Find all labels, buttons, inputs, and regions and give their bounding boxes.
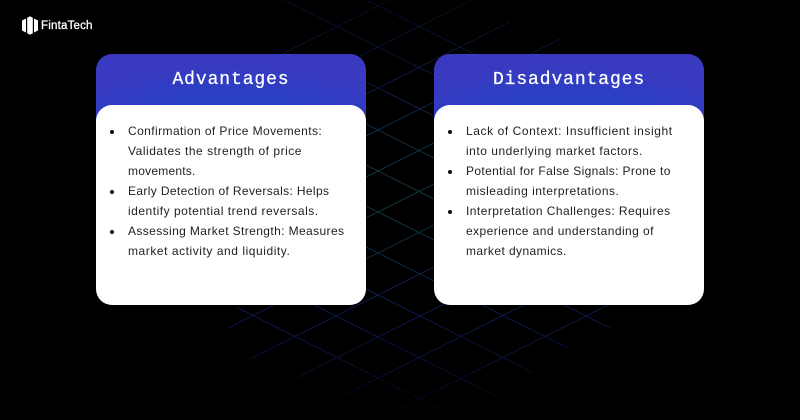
heading: disadvantages [434,54,704,134]
heading: disadvantages: Disadvantages [493,70,645,90]
list: disadvantages [434,105,704,305]
heading: advantages [96,54,366,134]
advantage: early detection of reversals: Early Detection of Reversals: Helps [128,184,329,198]
panel: disadvantages [434,54,704,305]
disadvantage: potential for false signals: misleading interpretations. [466,184,619,198]
advantage: confirmation of price movements: Validates the strength of price [128,144,302,158]
advantage: assessing market strength: market activity and liquidity. [128,244,290,258]
advantage: confirmation of price movements [128,121,363,181]
disadvantage: lack of context: into underlying market factors. [466,144,643,158]
disadvantage: potential for false signals: Potential for False Signals: Prone to [466,164,671,178]
advantage: early detection of reversals [128,181,363,221]
disadvantage: interpretation challenges: experience and understanding of [466,224,654,238]
disadvantage: interpretation challenges: Interpretation Challenges: Requires [466,204,671,218]
disadvantage: lack of context [466,121,701,161]
advantage: early detection of reversals: identify potential trend reversals. [128,204,319,218]
logo: FintaTech [22,16,93,35]
disadvantage: lack of context: Lack of Context: Insufficient insight [466,124,673,138]
advantage: confirmation of price movements: Confirmation of Price Movements: [128,124,322,138]
disadvantage: interpretation challenges: market dynamics. [466,244,567,258]
advantage: assessing market strength [128,221,363,261]
panel: advantages [96,54,366,305]
heading: advantages: Advantages [172,70,290,90]
logo: FintaTech: FintaTech [41,20,93,32]
advantage: confirmation of price movements: movements. [128,164,196,178]
icon: hexagon logo mark [22,16,38,35]
advantage: assessing market strength: Assessing Market Strength: Measures [128,224,344,238]
disadvantage: potential for false signals [466,161,701,201]
list: advantages [96,105,366,305]
disadvantage: interpretation challenges [466,201,701,261]
